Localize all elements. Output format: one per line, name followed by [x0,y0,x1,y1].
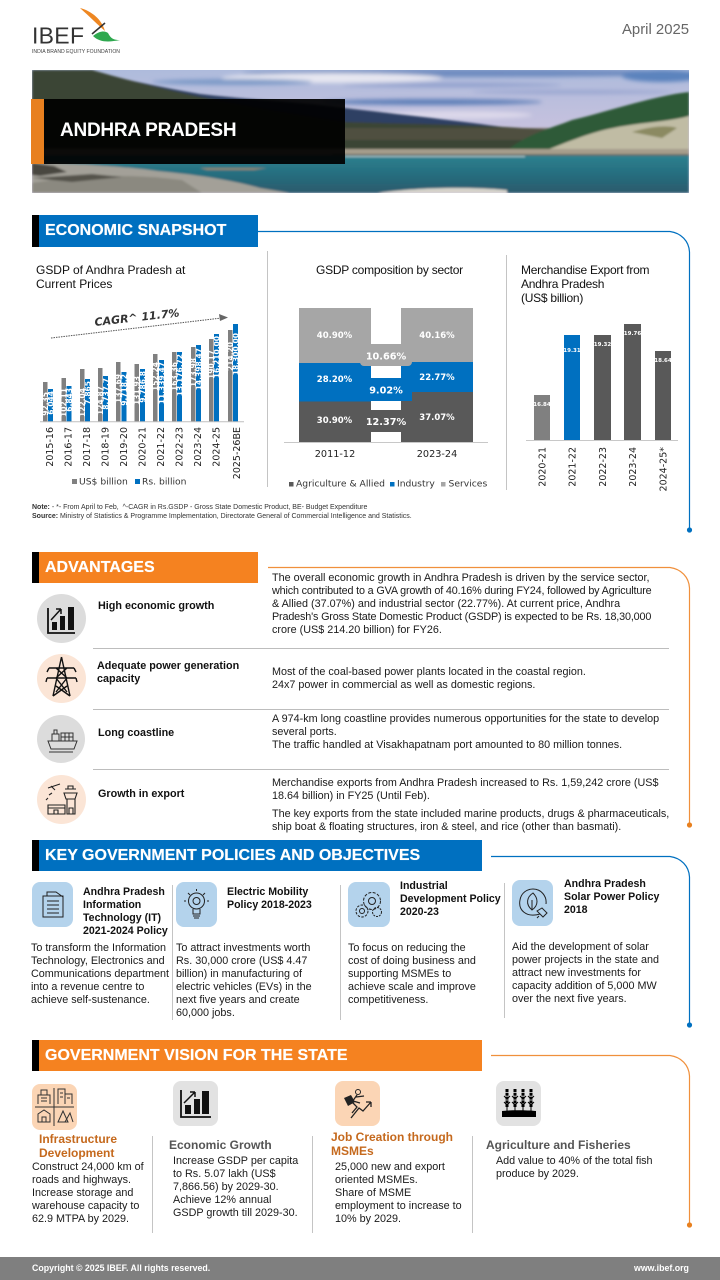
policy text: IT: Communications department [31,968,169,980]
icon: export airport [37,775,86,824]
policy text: industrial: To focus on reducing the [348,942,466,954]
advantage text: growth: which contributed to a GVA growth of 40.16% during FY24, followed by Agriculture [272,585,652,597]
advantage heading: power: capacity [97,673,140,685]
banner photo: coastal landscape [32,70,689,193]
policy text: IT: achieve self-sustenance. [31,994,150,1006]
advantage heading: power [97,660,239,685]
advantage text: growth: The overall economic growth in Andhra Pradesh is driven by the service sector, [272,572,649,584]
policy text: industrial [348,942,476,1006]
advantage text: growth: Pradesh's Gross State Domestic Product (GSDP) is expected to be Rs. 18,30,000 [272,611,651,623]
policy heading: solar: Solar Power Policy [564,891,659,903]
icon: job creation [335,1081,380,1126]
vision text: economic growth [173,1155,298,1219]
policy heading: industrial: 2020-23 [400,906,439,918]
divider [340,885,341,1020]
stacked chart: GSDP composition: 40.90% [317,331,353,341]
stacked chart: GSDP composition: 28.20% [317,375,353,385]
policy text: EV: billion) in manufacturing of [176,968,302,980]
bar chart: GSDP: 2024-25 [212,427,222,467]
icon: economic growth [173,1081,218,1126]
policy text: solar: capacity addition of 5,000 MW [512,980,657,992]
vision text: infrastructure: warehouse capacity to [32,1200,139,1212]
icon: infrastructure [32,1084,77,1130]
divider [172,885,173,1020]
advantage text: coastline: several ports. [272,726,337,738]
policy heading: solar: Andhra Pradesh [564,878,646,890]
policy heading: EV: Policy 2018-2023 [227,899,312,911]
bar chart: GSDP: 2017-18 [82,427,93,467]
advantage text: power: 24x7 power in commercial as well as domestic regions. [272,679,535,691]
vision text: infrastructure [32,1161,144,1225]
bar chart: GSDP: 102.11 [59,388,68,417]
icon: solar leaf [512,880,553,926]
vision text: job creation: oriented MSMEs. [335,1174,418,1186]
vision heading: infrastructure: Development [39,1146,114,1160]
bar chart: GSDP: 16,210.00 [212,336,221,378]
bar chart: merchandise export: 2020-21 [538,447,548,487]
advantage text: export: ship boat & floating structures, iron & steel, and rice (other than basmati). [272,821,621,833]
logo: IBEF: INDIA BRAND EQUITY FOUNDATION [32,49,120,55]
legend: composition: Agriculture & Allied [296,478,385,490]
policy text: IT: To transform the Information [31,942,166,954]
section heading: policies [32,840,482,871]
policy heading: industrial [400,880,501,918]
policy heading: solar: 2018 [564,904,588,916]
vision text: infrastructure: roads and highways. [32,1174,131,1186]
vision text: job creation: 25,000 new and export [335,1161,445,1173]
vision heading: economic growth: Economic Growth [169,1138,272,1152]
icon: gears [348,882,390,927]
bar chart: GSDP: 152.24 [151,362,160,391]
icon: cargo ship [37,715,85,763]
chart title: exports [521,263,649,305]
bar chart: merchandise export: 16.84 [533,402,551,408]
bar chart: GSDP: 2018-19 [100,427,112,467]
footer [0,1257,720,1280]
vision heading: job creation [331,1130,453,1158]
stacked chart: GSDP composition: 2023-24 [417,449,457,460]
divider [267,251,268,487]
icon: wheat field [496,1081,541,1126]
bar chart: GSDP: 137.69 [114,374,123,403]
vision text: job creation: employment to increase to [335,1200,462,1212]
bar chart: GSDP: 7,865 [83,381,92,405]
bar chart: GSDP: 6,843 [65,388,74,412]
policy text: IT [31,942,169,1006]
policy text: solar: over the next five years. [512,993,627,1005]
policy text: IT: Technology, Electronics and [31,955,165,967]
policy text: EV [176,942,312,1019]
policy text: industrial: competitiveness. [348,994,428,1006]
title band: Andhra Pradesh [31,99,345,164]
chart title: composition: GSDP composition by sector [316,263,463,277]
bar chart: GSDP: 11,339.47 [157,362,166,404]
note and source: Note: - *- From April to Feb, ^-CAGR in Rs.GSDP - Gross State Domestic Product, BE- Budget Expenditure [32,504,367,511]
policy heading: IT: Andhra Pradesh [83,886,165,898]
bar chart: merchandise export: 19.32 [594,342,611,348]
policy text: solar: Aid the development of solar [512,941,649,953]
logo: IBEF: IBEF [32,22,84,48]
policy text: EV: To attract investments worth [176,942,310,954]
bar chart: merchandise export: 2024-25* [658,447,670,491]
vision text: infrastructure: Increase storage and [32,1187,133,1199]
bar chart: GSDP: 2021-22 [156,427,167,467]
policy heading: EV: Electric Mobility [227,886,308,898]
stacked chart: GSDP composition: 12.37% [366,417,406,428]
note and source [32,504,412,520]
policy heading: solar [564,878,660,916]
footer: Copyright © 2025 IBEF. All rights reserved. [32,1263,210,1273]
title band: Andhra Pradesh: ANDHRA PRADESH [60,120,236,141]
bar chart: merchandise export: 19.31 [563,348,581,354]
policy text: industrial: achieve scale and improve [348,981,476,993]
divider [312,1136,313,1233]
date: April 2025 [622,22,689,38]
vision text: economic growth: to Rs. 5.07 lakh (US$ [173,1168,276,1180]
stacked chart: GSDP composition [284,308,488,490]
icon: power tower [37,654,86,703]
vision text: job creation [335,1161,462,1225]
icon: IT document [32,882,73,927]
bar chart: merchandise export: 2022-23 [598,447,609,487]
stacked chart: GSDP composition: 40.16% [419,331,455,341]
advantage text: growth: & Allied (37.07%) and industrial sector (22.77%). At current price, Andhra [272,598,620,610]
bar chart: GSDP: 9,718.2 [120,374,129,406]
vision text: economic growth: 7,866.56) by 2029-30. [173,1181,279,1193]
bar chart: GSDP: 214.20 [226,342,235,371]
legend: composition: Industry [397,478,435,490]
vision text: agriculture: Add value to 40% of the total fish [496,1155,652,1167]
legend: GSDP: US$ billion [79,476,128,488]
advantage heading: high economic growth: High economic growth [98,600,214,612]
chart title: GSDP: GSDP of Andhra Pradesh at [36,263,185,277]
bar chart: GSDP: 131.93 [132,376,141,405]
policy heading: IT: Information [83,899,141,911]
vision text: agriculture: produce by 2029. [496,1168,579,1180]
legend: GSDP [72,476,187,488]
CAGR trend arrow: CAGR^ 11.7% [94,306,180,329]
vision heading: agriculture: Agriculture and Fisheries [486,1138,631,1152]
bar chart: GSDP: 8,737.7 [101,378,110,410]
bar chart: GSDP: 2019-20 [119,427,130,467]
advantage text: power: Most of the coal-based power plants located in the coastal region. [272,666,586,678]
advantage text: export [272,777,669,833]
policy heading: IT [83,886,168,937]
section heading: vision: GOVERNMENT VISION FOR THE STATE [45,1047,348,1064]
advantage text: export: The key exports from the state included marine products, drugs & pharmaceuticals, [272,808,669,820]
section heading: economic snapshot [32,215,258,247]
bar chart: GSDP: 2016-17 [64,427,74,467]
bar chart: GSDP: 18,300.00 [231,333,240,375]
bar chart: merchandise export: 18.64 [654,358,672,364]
policy heading: IT: Technology (IT) [83,912,161,924]
bar chart: GSDP: 2022-23 [174,427,186,467]
connector: advantages [268,566,692,828]
policy text: industrial: supporting MSMEs to [348,968,451,980]
section heading: vision [32,1040,482,1071]
advantage text: growth [272,572,652,636]
policy text: EV: electric vehicles (EVs) in the [176,981,312,993]
vision text: economic growth: GSDP growth till 2029-30. [173,1207,298,1219]
CAGR trend arrow [51,306,228,338]
vision text: economic growth: Achieve 12% annual [173,1194,271,1206]
vision text: agriculture [496,1155,652,1181]
policy heading: EV [227,886,312,911]
bar chart: GSDP: 122.04 [78,388,87,417]
stacked chart: GSDP composition: 9.02% [369,386,403,396]
connector: policies [491,856,692,1028]
vision text: job creation: Share of MSME [335,1187,411,1199]
stacked chart: GSDP composition: 37.07% [419,413,455,423]
vision heading: job creation: MSMEs [331,1144,374,1158]
policy text: EV: Rs. 30,000 crore (US$ 4.47 [176,955,307,967]
footer: www.ibef.org [634,1263,689,1273]
bar chart: GSDP: 6,044 [46,391,55,415]
vision heading: job creation: Job Creation through [331,1130,453,1144]
vision heading: infrastructure: Infrastructure [39,1132,117,1146]
divider [472,1136,473,1233]
bar chart: GSDP: 163.36 [170,362,179,391]
advantage heading: export: Growth in export [98,788,184,800]
section heading: advantages: ADVANTAGES [45,559,155,576]
policy heading: IT: 2021-2024 Policy [83,925,168,937]
bar chart: GSDP: 2015-16 [45,427,56,467]
stacked chart: GSDP composition: 2011-12 [315,449,355,460]
divider [152,1136,153,1233]
bar chart: GSDP [40,306,244,488]
advantage text: coastline: A 974-km long coastline provides numerous opportunities for the state to develop [272,713,659,725]
advantage heading: coastline: Long coastline [98,727,174,739]
policy text: solar [512,941,659,1005]
bar chart: merchandise export: 2023-24 [628,447,639,487]
bar chart: GSDP: 190.17 [207,350,216,379]
advantage text: export: 18.64 billion) in FY25 (Until Feb). [272,790,430,802]
divider [504,883,505,1018]
vision text: infrastructure: 62.9 MTPA by 2029. [32,1213,129,1225]
vision text: job creation: 10% by 2029. [335,1213,401,1225]
divider [506,255,507,490]
chart title: exports: (US$ billion) [521,291,583,305]
policy text: EV: 60,000 jobs. [176,1007,235,1019]
policy text: industrial: cost of doing business and [348,955,476,967]
bar chart: GSDP: 2020-21 [138,427,148,467]
section heading: policies: KEY GOVERNMENT POLICIES AND OBJECTIVES [45,847,420,864]
stacked chart: GSDP composition: 10.66% [366,352,406,362]
note and source: Source: Ministry of Statistics & Programme Implementation, Directorate General of Commercial Intelligence and Statistics. [32,513,412,520]
policy heading: industrial: Development Policy [400,893,501,905]
chart title: exports: Andhra Pradesh [521,277,604,291]
policy text: solar: attract new investments for [512,967,641,979]
advantage text: coastline: The traffic handled at Visakhapatnam port amounted to 80 million tonnes. [272,739,622,751]
legend: composition [289,478,487,490]
connector: economic snapshot [258,230,692,533]
bar chart: GSDP: 173.98 [189,358,198,387]
advantage text: coastline [272,713,659,751]
bar chart: GSDP: 124.87 [96,386,105,415]
advantage heading: power: Adequate power generation [97,660,239,672]
policy text: solar: power projects in the state and [512,954,659,966]
advantage text: growth: crore (US$ 214.20 billion) for FY26. [272,624,442,636]
advantage text: export: Merchandise exports from Andhra Pradesh increased to Rs. 1,59,242 crore (US$ [272,777,658,789]
connector: vision [491,1054,692,1228]
section heading: advantages [32,552,258,583]
bar chart: GSDP: 2023-24 [193,427,204,467]
vision text: economic growth: Increase GSDP per capita [173,1155,298,1167]
stacked chart: GSDP composition: 22.77% [419,373,455,383]
logo: IBEF [32,8,120,55]
stacked chart: GSDP composition: 30.90% [317,416,353,426]
icon: growth chart [37,594,86,643]
bar chart: merchandise export: 19.76 [624,331,641,337]
chart title: GSDP: Current Prices [36,277,112,291]
advantage text: power [272,666,586,691]
legend: GSDP: Rs. billion [142,476,187,488]
policy text: IT: into a revenue centre to [31,981,144,993]
vision heading: infrastructure [39,1132,117,1160]
bar chart: GSDP: 13,176.72 [175,354,184,396]
bar chart: GSDP: 92.35 [41,392,50,416]
legend: composition: Services [448,478,487,490]
chart title: GSDP [36,263,186,291]
icon: EV bulb [176,882,217,927]
vision text: infrastructure: Construct 24,000 km of [32,1161,144,1173]
policy text: EV: next five years and create [176,994,300,1006]
bar chart: GSDP: 9,786.8 [138,371,147,403]
chart title: exports: Merchandise Export from [521,263,649,277]
bar chart: merchandise export: 2021-22 [568,447,578,487]
bar chart: GSDP: 14,398.47 [194,348,203,390]
policy heading: industrial: Industrial [400,880,448,892]
row dividers [93,648,669,649]
section heading: economic snapshot: ECONOMIC SNAPSHOT [45,222,226,239]
bar chart: merchandise export [526,324,678,491]
bar chart: GSDP: 2025-26BE [232,427,243,479]
